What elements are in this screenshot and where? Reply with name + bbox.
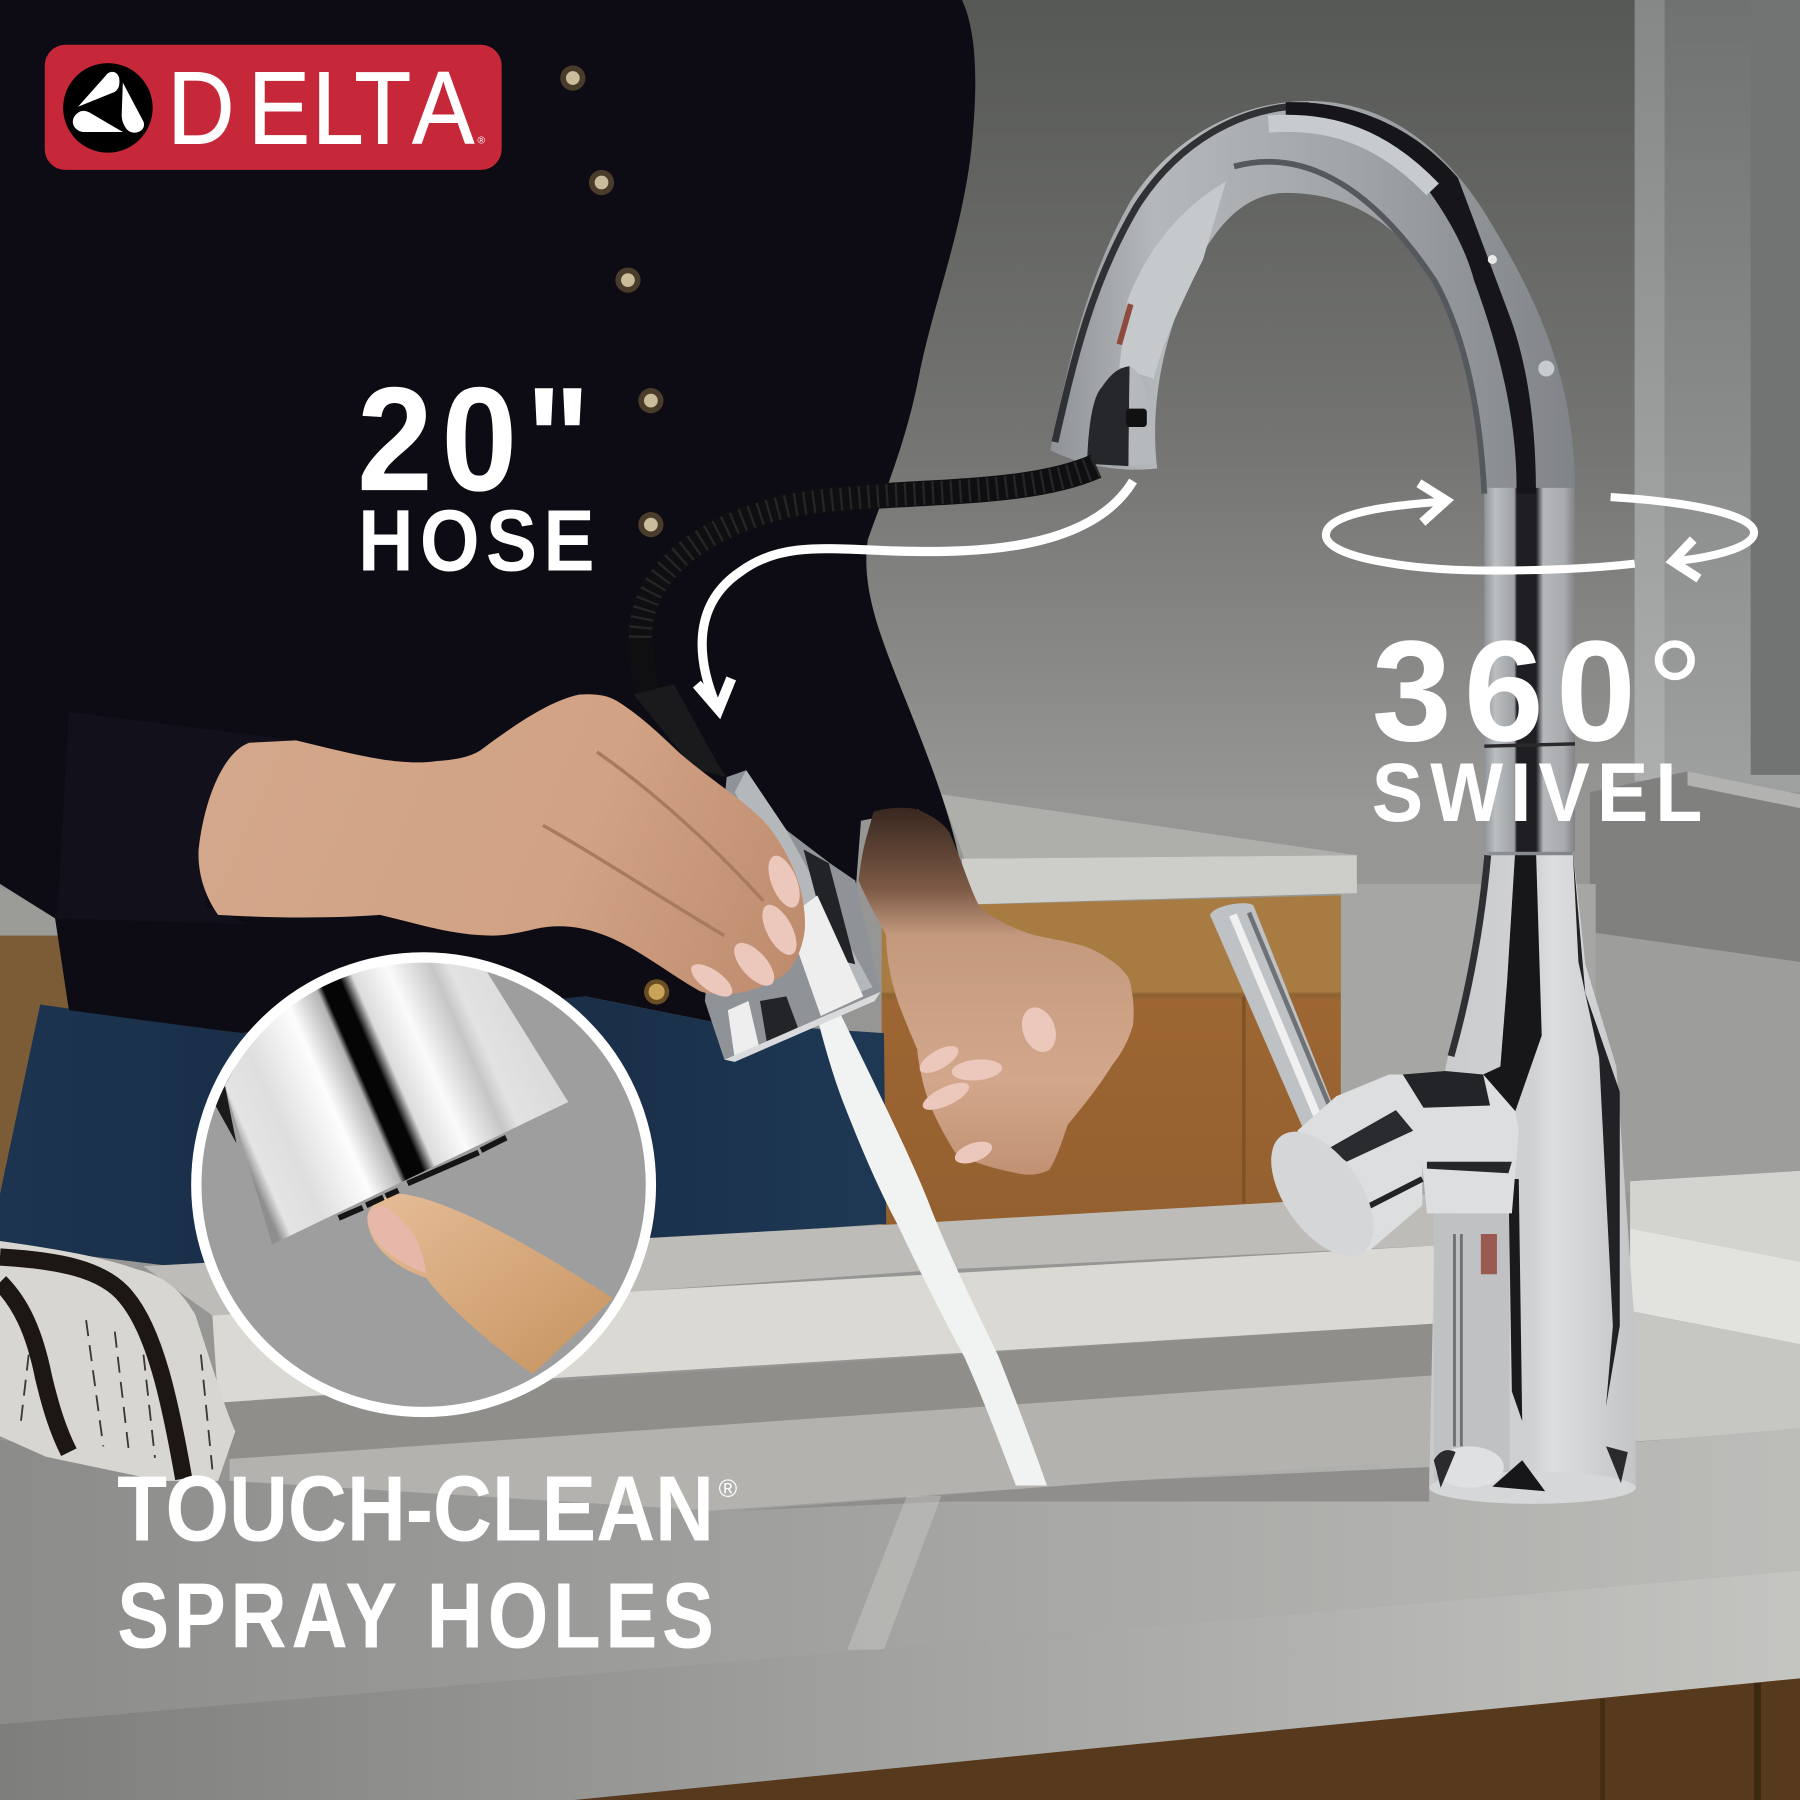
front dark band xyxy=(1508,1179,1522,1421)
inset finger xyxy=(367,1194,613,1374)
connector arm xyxy=(1389,1071,1519,1213)
inset chrome head xyxy=(225,959,568,1244)
hose label xyxy=(357,357,595,590)
back counter xyxy=(941,794,1357,905)
handle cylinder xyxy=(1297,1074,1422,1252)
basin upper shadow xyxy=(218,1324,1435,1459)
finger creases xyxy=(543,752,763,936)
jeans xyxy=(0,996,886,1266)
basin lower xyxy=(230,1375,1435,1511)
wood cabinet xyxy=(882,895,1341,1226)
right sink rim xyxy=(1630,1171,1800,1442)
sweater buttons xyxy=(560,65,669,1004)
front reflective cylinder xyxy=(1434,1213,1510,1480)
spout tip dark recess xyxy=(1087,366,1130,466)
swivel label: 360 xyxy=(1372,611,1636,771)
lower stem right dark band xyxy=(1573,849,1620,1406)
touch-clean label xyxy=(117,1457,738,1668)
ledge front face xyxy=(212,1246,1435,1403)
lens flare xyxy=(1488,255,1497,264)
delta logo: ® xyxy=(478,135,486,146)
counter front edge xyxy=(0,1570,1800,1800)
touch-clean label: SPRAY HOLES xyxy=(117,1564,714,1668)
top highlight xyxy=(1268,123,1433,189)
stem bands xyxy=(1484,488,1575,852)
sink shadow xyxy=(735,1467,1429,1511)
outer rim dark xyxy=(1055,106,1309,442)
fingernails xyxy=(686,851,1062,1168)
inset spray face holes xyxy=(339,1138,506,1218)
delta logo: DELTA xyxy=(167,50,475,166)
hose label: 20" xyxy=(357,357,590,522)
hose arrow xyxy=(697,481,1133,709)
lever handle xyxy=(1210,903,1422,1274)
delta logo xyxy=(45,45,502,170)
touch-clean label: TOUCH-CLEAN xyxy=(117,1457,714,1561)
spout arc xyxy=(1050,101,1575,855)
left cabinet xyxy=(0,890,80,1194)
swivel label: ° xyxy=(1646,611,1704,771)
ledge top xyxy=(143,1194,1435,1316)
inset: touch-clean spray head xyxy=(196,957,651,1412)
base wood xyxy=(574,1678,1800,1800)
sweater xyxy=(0,0,975,1033)
touch-clean label: ® xyxy=(719,1475,738,1503)
swivel label: SWIVEL xyxy=(1372,746,1702,840)
left hand and arm xyxy=(859,808,1134,1175)
neck left edge xyxy=(1451,855,1488,1056)
sprayer head xyxy=(634,684,880,1062)
top dark band xyxy=(1286,102,1536,494)
window frame xyxy=(1590,0,1800,1194)
front counter surface xyxy=(0,1428,1800,1724)
towel xyxy=(0,1241,235,1481)
countertop and sink xyxy=(0,1171,1800,1800)
pull-down hose xyxy=(640,466,1096,698)
inner dark line xyxy=(1234,162,1484,494)
faucet xyxy=(1050,101,1636,1504)
water reflection xyxy=(847,1496,941,1650)
360 swivel arrows xyxy=(1326,483,1754,579)
lower stem central dark band xyxy=(1483,849,1542,1111)
logo mark xyxy=(63,63,153,153)
swivel label xyxy=(1372,611,1704,840)
handle end disc xyxy=(1251,1114,1394,1274)
water stream xyxy=(817,1011,1047,1485)
spout tip highlight xyxy=(1128,366,1155,466)
right hand and arm xyxy=(198,694,1062,1168)
left reflection xyxy=(1119,181,1226,379)
faucet collar xyxy=(1484,744,1575,746)
faucet lower body xyxy=(1429,849,1636,1504)
hose label: HOSE xyxy=(358,493,595,590)
lower wall xyxy=(1341,884,1596,1217)
